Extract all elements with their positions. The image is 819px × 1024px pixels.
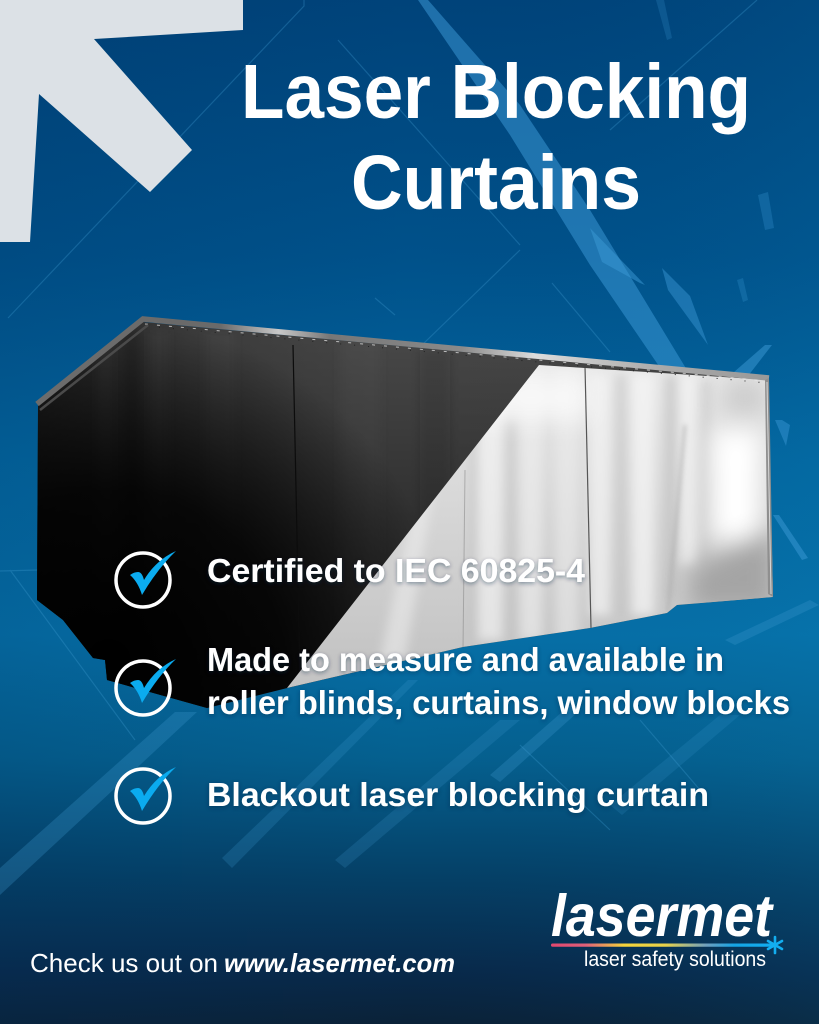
curtain rail [37, 319, 773, 597]
logo tagline: laser safety solutions [584, 948, 766, 971]
check icon 2 [116, 659, 176, 715]
arrow graphic [0, 0, 243, 242]
bullet 2 text [207, 641, 790, 721]
bullet 2 text: roller blinds, curtains, window blocks [207, 684, 790, 721]
logo wordmark: lasermet [551, 883, 774, 949]
white half of curtain [280, 360, 780, 700]
footer call to action: Check us out on [30, 948, 218, 978]
curtain photo [30, 315, 790, 715]
bullet 3 text: Blackout laser blocking curtain [207, 776, 709, 813]
bullet list [116, 551, 790, 823]
lasermet logo [551, 883, 782, 971]
title: Curtains [351, 140, 641, 226]
check icon 1 [116, 551, 176, 607]
footer call to action [30, 948, 455, 978]
title: Laser Blocking [241, 49, 751, 135]
black half of curtain [30, 315, 790, 715]
laser star [768, 937, 782, 953]
title [241, 49, 751, 226]
bullet 1 text: Certified to IEC 60825-4 [207, 552, 586, 589]
check icon 3 [116, 767, 176, 823]
bullet 2 text: Made to measure and available in [207, 641, 724, 678]
footer call to action: www.lasermet.com [224, 948, 455, 978]
laser line [551, 944, 773, 947]
